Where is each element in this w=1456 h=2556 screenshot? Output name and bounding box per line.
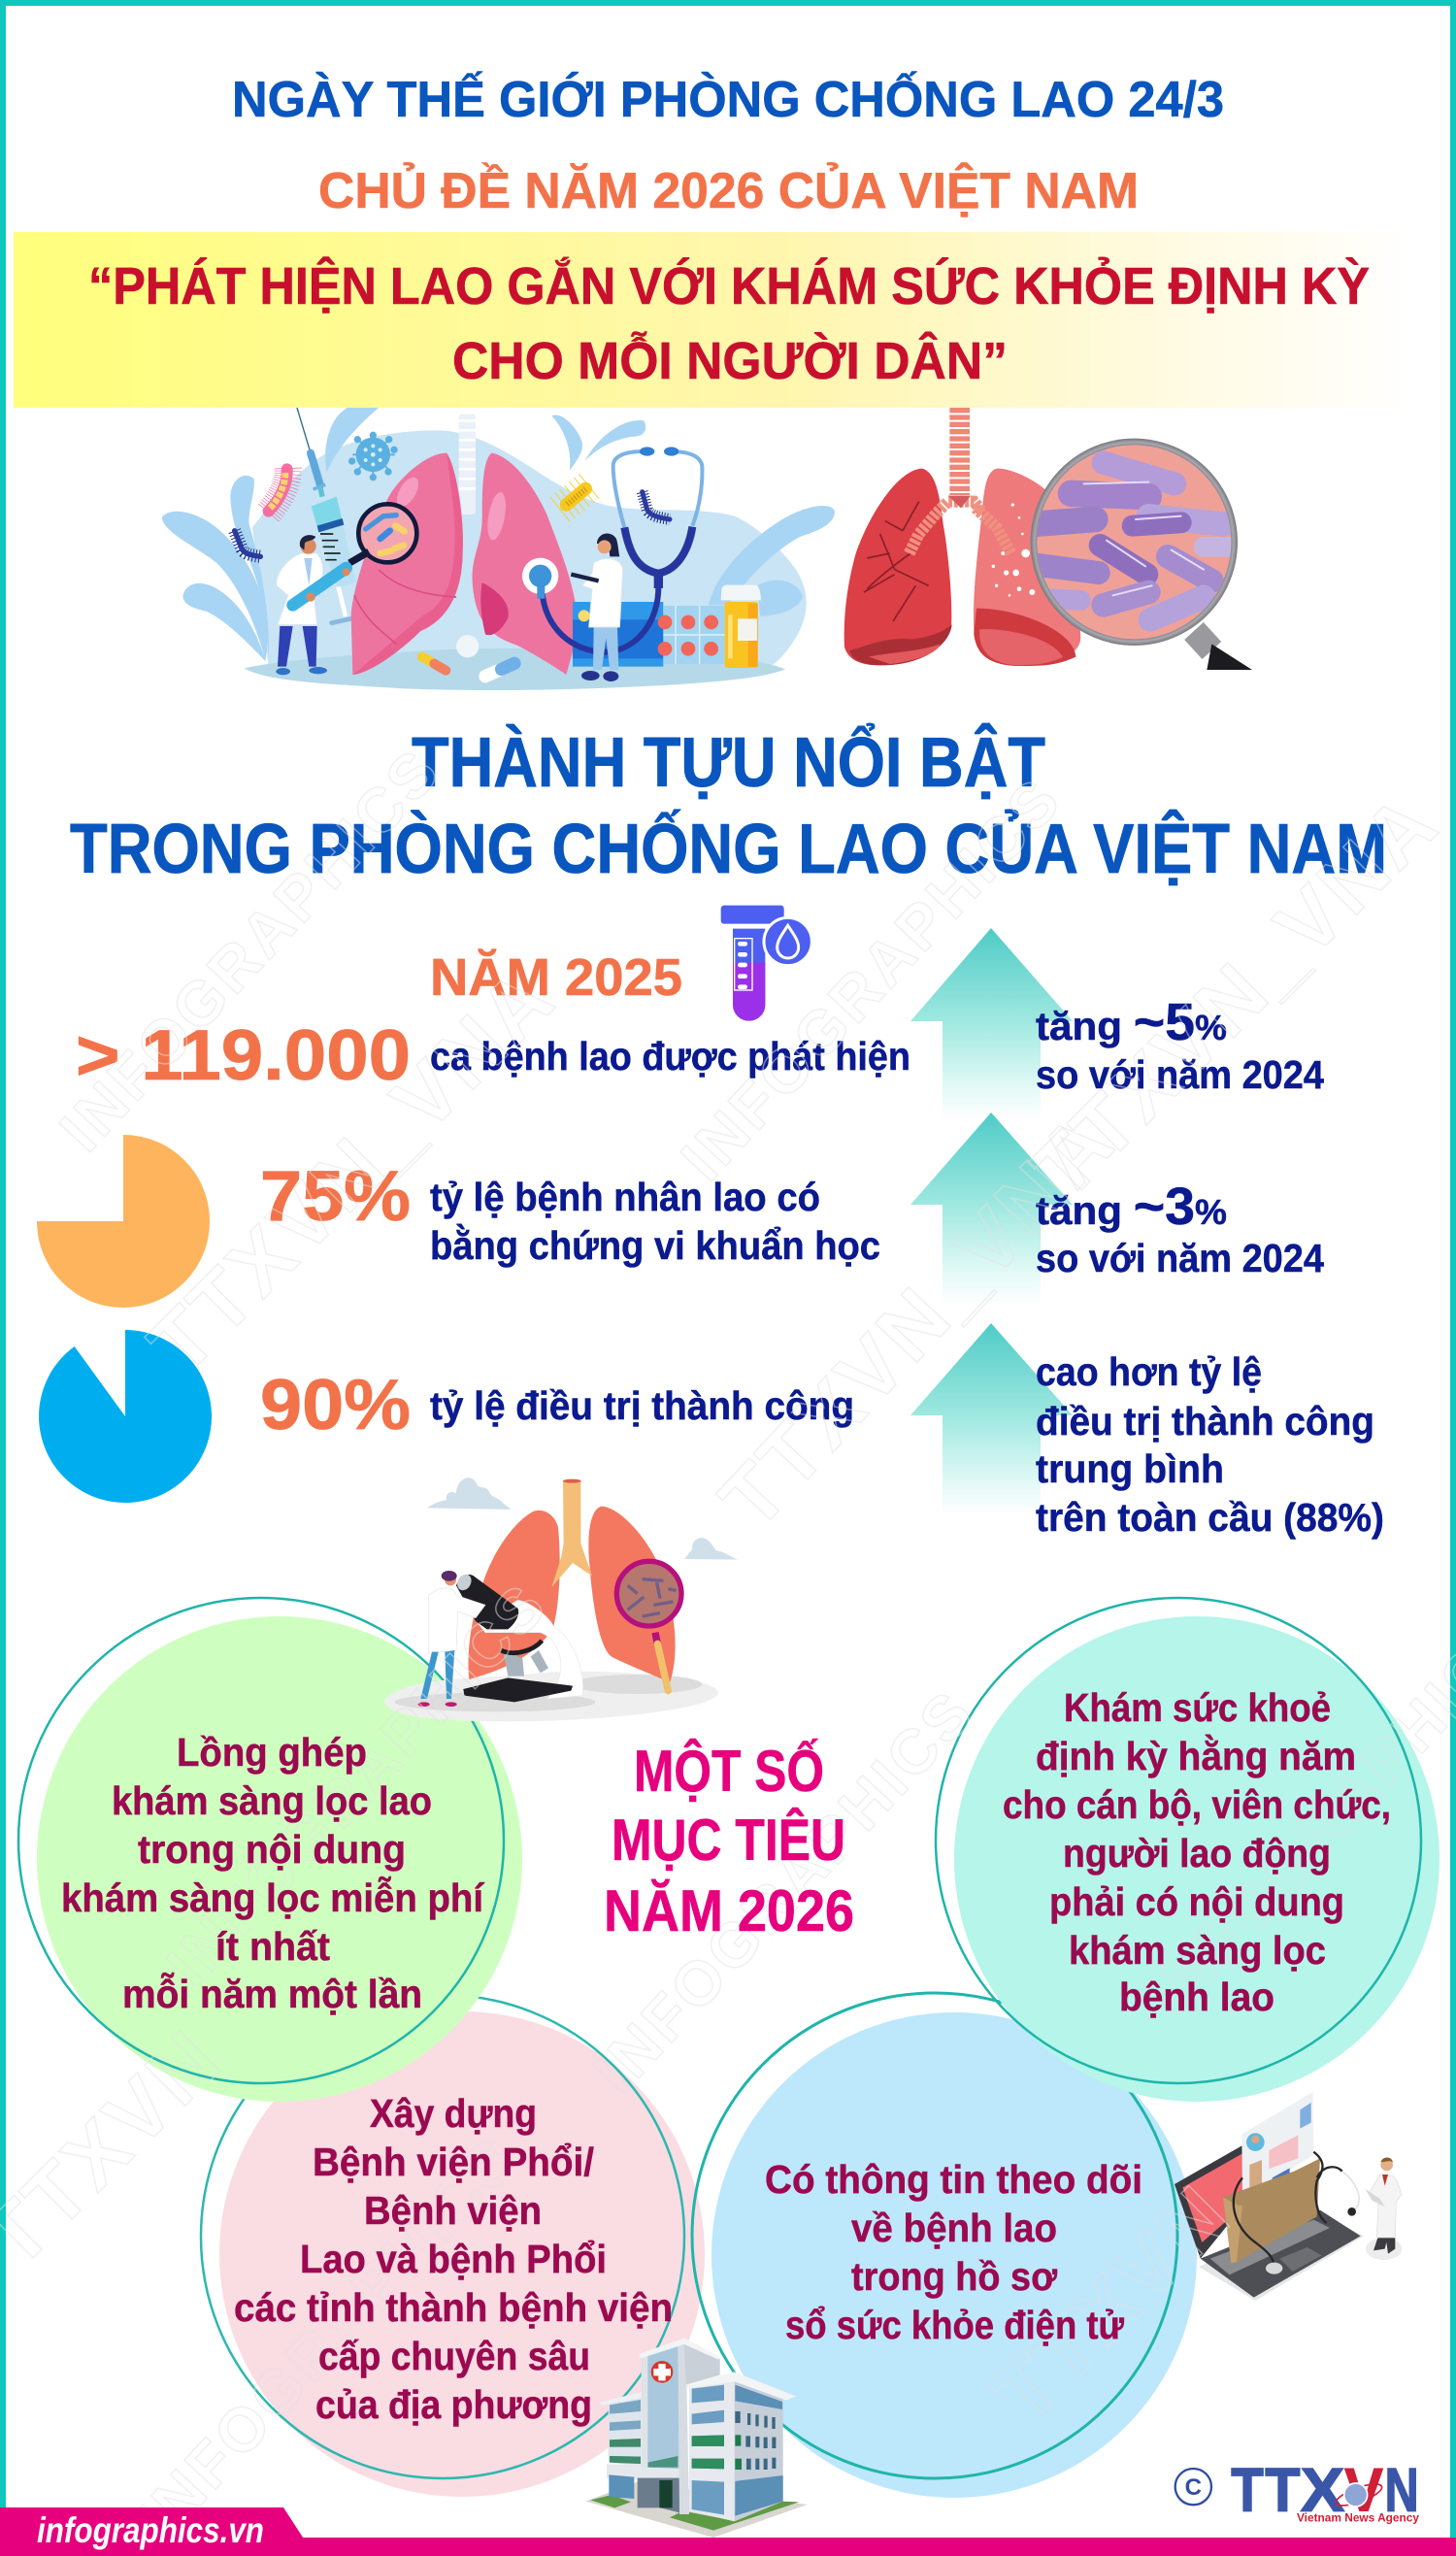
- footer bar: [0, 2507, 1456, 2556]
- center heading: goals 2026: MỘT SỐ: [634, 1739, 824, 1804]
- note: above global average: trung bình: [1036, 1446, 1224, 1491]
- goal text: green circle: ít nhất: [215, 1924, 330, 1969]
- goal text: green circle: khám sàng lọc miễn phí: [61, 1876, 484, 1920]
- footer bar: infographics.vn: [37, 2510, 264, 2550]
- illustration: lungs with doctors: [162, 402, 835, 690]
- achievements heading: THÀNH TỰU NỔI BẬT: [412, 723, 1045, 802]
- yellow bacteria: [560, 483, 592, 510]
- note: above global average: [1036, 1349, 1384, 1540]
- goal text: pink circle: Xây dựng: [370, 2091, 537, 2136]
- logo: TTXVN: X: [1301, 2457, 1344, 2525]
- circle: pink: [201, 1995, 705, 2497]
- watermark: TTXVN_VNA: [132, 950, 573, 1391]
- watermark: INFOGRAPHICS: [668, 763, 1075, 1194]
- goal text: blue circle: trong hồ sơ: [851, 2254, 1058, 2299]
- worm: [643, 492, 670, 519]
- watermark: TTXVN_VNA: [703, 1094, 1133, 1546]
- syringe: [296, 405, 311, 453]
- goal text: green circle: mỗi năm một lần: [122, 1972, 422, 2016]
- stat: bacteriological confirmation: 75%: [260, 1157, 411, 1236]
- goal text: pink circle: của địa phương: [315, 2382, 592, 2427]
- stat: cases detected: [76, 1016, 910, 1095]
- magnifier: [358, 504, 416, 562]
- note: 3 percent increase: so với năm 2024: [1036, 1236, 1324, 1280]
- goal text: green circle: [61, 1730, 484, 2016]
- logo: TTXVN: [1175, 2457, 1419, 2525]
- goal text: blue circle: sổ sức khỏe điện tử: [785, 2303, 1124, 2347]
- icon: test tube: [721, 906, 811, 1021]
- watermark: INFOGRAPHICS: [124, 2122, 532, 2553]
- goal text: teal circle: người lao động: [1063, 1831, 1331, 1876]
- stat: treatment success: 90%: [260, 1366, 411, 1444]
- circle: teal: [936, 1598, 1439, 2102]
- logo: TTXVN: C: [1185, 2474, 1202, 2501]
- stethoscope: [613, 451, 702, 527]
- watermark: TTXVN_VNA: [1015, 776, 1456, 1216]
- center heading: goals 2026: [604, 1739, 854, 1943]
- note: above global average: cao hơn tỷ lệ: [1036, 1349, 1262, 1394]
- logo: TTXVN: T: [1265, 2457, 1300, 2525]
- logo: TTXVN: Vietnam News Agency: [1297, 2510, 1419, 2524]
- note: 3 percent increase: [1036, 1178, 1324, 1280]
- goal text: teal circle: Khám sức khoẻ: [1064, 1685, 1331, 1730]
- virus: [349, 433, 397, 480]
- goal text: pink circle: cấp chuyên sâu: [318, 2334, 590, 2378]
- circle: green: [18, 1598, 522, 2102]
- note: 5 percent increase: tăng ~5%: [1036, 993, 1227, 1051]
- doctor woman: [593, 626, 618, 670]
- watermark: INFOGRAPHICS: [153, 1569, 561, 2000]
- illustration: microscope and lungs: [384, 1477, 738, 1721]
- stat: bacteriological confirmation: [260, 1157, 880, 1268]
- subtitle: CHỦ ĐỀ NĂM 2026 CỦA VIỆT NAM: [318, 162, 1139, 219]
- stat: treatment success: tỷ lệ điều trị thành công: [430, 1383, 854, 1428]
- goal text: teal circle: phải có nội dung: [1049, 1879, 1344, 1924]
- illustration: red lungs with magnifier: [844, 408, 1252, 670]
- watermark: INFOGRAPHICS: [47, 734, 454, 1165]
- illustration: hospital: [585, 2338, 808, 2538]
- goal text: teal circle: khám sàng lọc: [1069, 1928, 1326, 1973]
- goal text: blue circle: về bệnh lao: [851, 2206, 1057, 2250]
- illustration: laptop with medical records: [1175, 2092, 1402, 2301]
- goal text: blue circle: [765, 2157, 1142, 2347]
- pills: [422, 657, 434, 663]
- note: 5 percent increase: [1036, 993, 1324, 1097]
- title: NGÀY THẾ GIỚI PHÒNG CHỐNG LAO 24/3: [232, 71, 1224, 128]
- stat: cases detected: > 119.000: [76, 1016, 411, 1095]
- magnifier with bacteria: [1031, 439, 1252, 670]
- doctor man: [277, 553, 323, 624]
- goal text: blue circle: Có thông tin theo dõi: [765, 2157, 1142, 2202]
- goal text: pink circle: [234, 2091, 673, 2427]
- watermark: INFOGRAPHICS: [580, 1676, 988, 2107]
- center heading: goals 2026: NĂM 2026: [604, 1878, 854, 1943]
- goal text: green circle: Lồng ghép: [177, 1730, 367, 1775]
- stat: cases detected: ca bệnh lao được phát hiện: [430, 1034, 910, 1079]
- achievements heading: [70, 723, 1387, 888]
- year label: NĂM 2025: [430, 948, 682, 1007]
- left lung: [351, 453, 463, 675]
- slogan banner: CHO MỖI NGƯỜI DÂN”: [452, 331, 1008, 390]
- pie chart: 75 percent: [37, 1135, 210, 1308]
- logo: TTXVN: N: [1385, 2457, 1419, 2525]
- goal text: teal circle: bệnh lao: [1119, 1975, 1274, 2019]
- goal text: green circle: khám sàng lọc lao: [112, 1778, 432, 1823]
- arrow 2: [910, 1112, 1073, 1304]
- arrow 3: [910, 1323, 1073, 1515]
- slogan banner: [14, 232, 1416, 408]
- goal text: pink circle: Lao và bệnh Phổi: [300, 2237, 607, 2281]
- pie chart: 90 percent: [39, 1330, 212, 1503]
- bacteria: [269, 466, 288, 513]
- note: 3 percent increase: tăng ~3%: [1036, 1178, 1227, 1236]
- note: 5 percent increase: so với năm 2024: [1036, 1052, 1324, 1097]
- goal text: green circle: trong nội dung: [138, 1827, 406, 1872]
- goal text: pink circle: Bệnh viện: [364, 2188, 542, 2233]
- logo: TTXVN: T: [1231, 2457, 1264, 2525]
- goal text: teal circle: định kỳ hằng năm: [1036, 1734, 1356, 1778]
- note: above global average: trên toàn cầu (88%): [1036, 1495, 1384, 1540]
- goal text: teal circle: [1003, 1685, 1391, 2019]
- stat: treatment success: [260, 1366, 854, 1444]
- right lung: [473, 453, 578, 675]
- note: above global average: điều trị thành công: [1036, 1399, 1374, 1444]
- circle: blue: [692, 1993, 1197, 2498]
- center heading: goals 2026: MỤC TIÊU: [612, 1808, 845, 1873]
- watermark: [0, 734, 1456, 2553]
- watermark: TTXVN: [976, 2167, 1249, 2440]
- stat: bacteriological confirmation: bằng chứng vi khuẩn học: [430, 1223, 880, 1268]
- goal text: pink circle: các tỉnh thành bệnh viện: [234, 2285, 673, 2330]
- slogan banner: “PHÁT HIỆN LAO GẮN VỚI KHÁM SỨC KHỎE ĐỊNH KỲ: [88, 256, 1370, 315]
- goal text: teal circle: cho cán bộ, viên chức,: [1003, 1782, 1391, 1827]
- logo: TTXVN: V: [1344, 2457, 1383, 2525]
- goal text: pink circle: Bệnh viện Phổi/: [313, 2140, 594, 2184]
- arrow 1: [910, 928, 1073, 1119]
- stat: bacteriological confirmation: tỷ lệ bệnh nhân lao có: [430, 1175, 820, 1219]
